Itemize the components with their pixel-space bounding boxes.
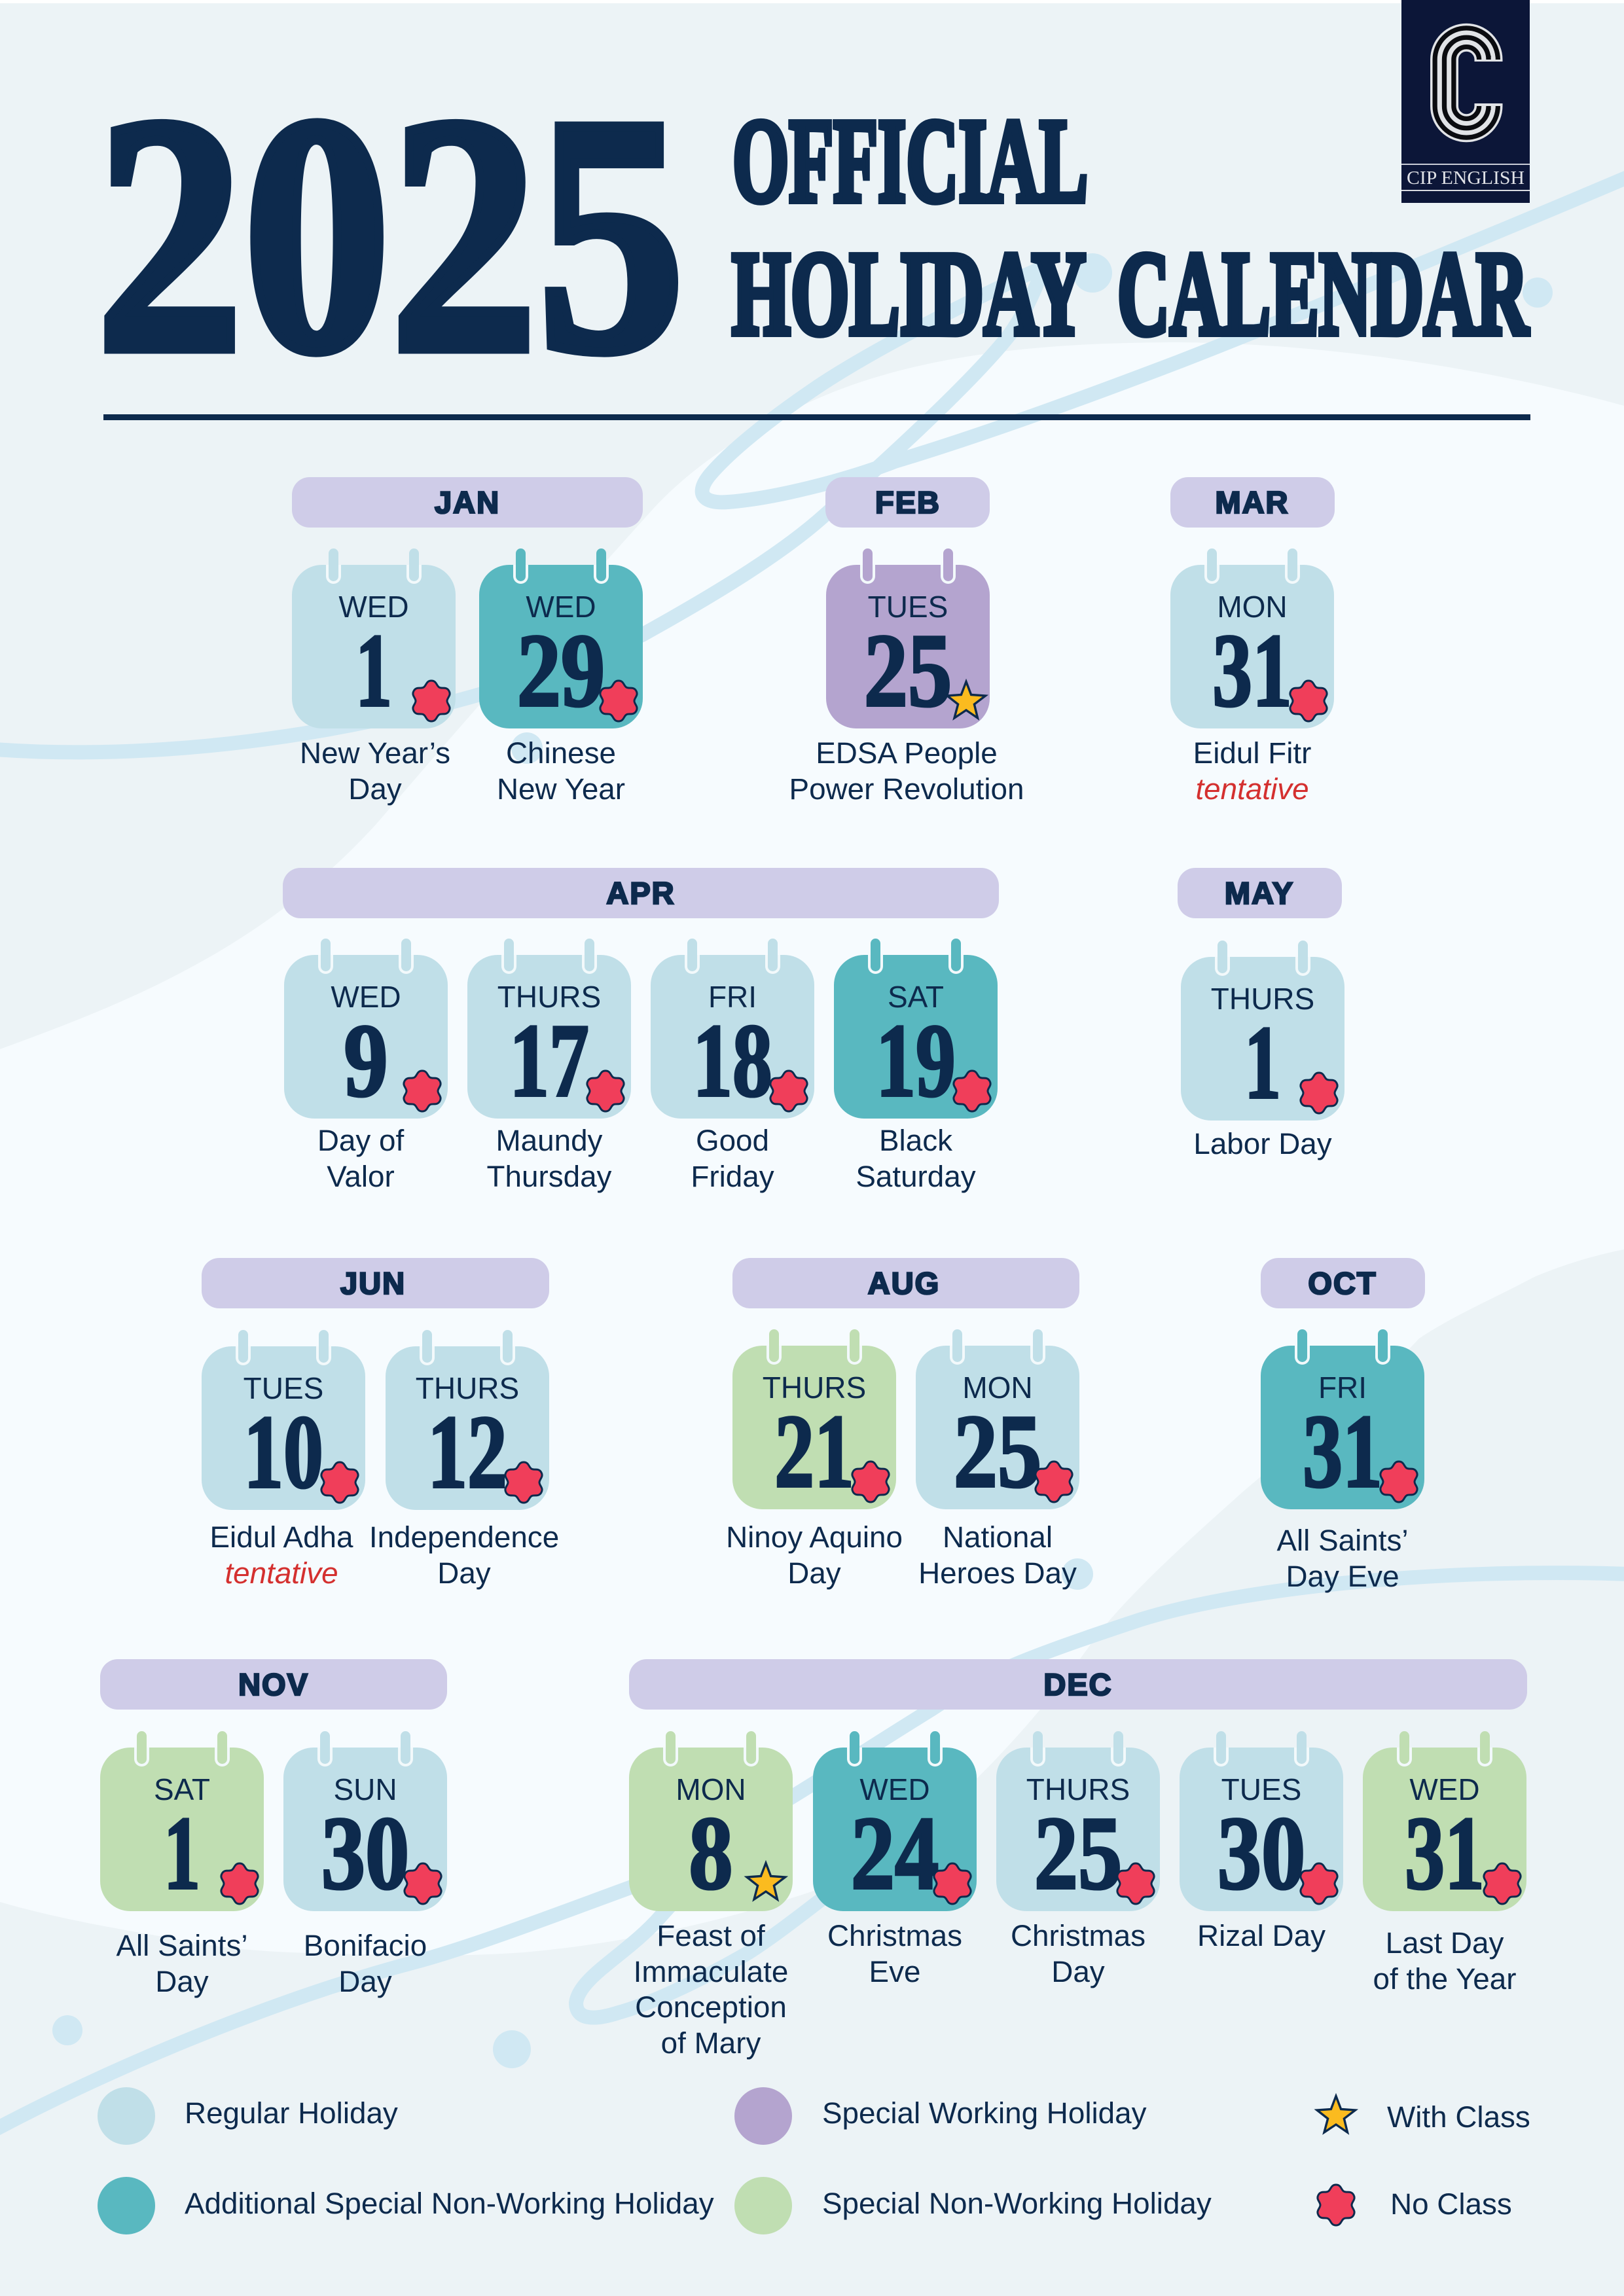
calendar: Nov 30 Bonifacio Day: 30 [321,1795,409,1911]
panel: FEB [789,477,1024,806]
icon: no class [505,1462,542,1503]
label: of the Year [1373,1962,1517,1996]
label: Bonifacio [304,1929,427,1962]
month header: JUN [202,1258,549,1308]
label: All Saints’ [1276,1524,1409,1557]
calendar: Aug 25 National Heroes Day: 25 [954,1393,1041,1509]
icon: no class [1290,681,1327,721]
label: Feast of [657,1919,765,1952]
legend item: Special Non-Working Holiday: Special Non-Working Holiday [822,2187,1212,2220]
calendar: Apr 9 Day of Valor [284,939,448,1193]
calendar: Apr 9 Day of Valor: 9 [344,1002,388,1119]
calendar: Jun 10 Eidul Adha [202,1330,365,1590]
icon: no class [321,1462,358,1503]
label: Rizal Day [1197,1919,1326,1952]
icon: no class [413,681,450,721]
label: Day Eve [1286,1560,1399,1593]
label: Good [696,1124,769,1157]
label: Day [787,1556,841,1590]
label: Maundy [496,1124,603,1157]
calendar: Apr 18 Good Friday: FRI [708,980,757,1014]
icon: no class [1301,1863,1337,1904]
icon: no class [1380,1462,1417,1502]
calendar: Dec 25 Christmas Day: THURS [1026,1772,1130,1806]
label: Christmas [1011,1919,1146,1952]
label: Day [437,1556,491,1590]
legend item: Regular Holiday [98,2087,398,2145]
month header: AUG: AUG [868,1266,940,1300]
legend [98,2087,1530,2234]
calendar: Dec 30 Rizal Day [1180,1731,1343,1952]
legend item: Additional Special Non-Working Holiday: Additional Special Non-Working Holiday [185,2187,714,2220]
icon: no class [1484,1863,1521,1904]
calendar: Dec 24 Christmas Eve: 24 [851,1795,939,1911]
label: Heroes Day [918,1556,1077,1590]
calendar: Nov 30 Bonifacio Day [283,1731,447,1998]
icon: no class [1117,1863,1154,1904]
legend item: Additional Special Non-Working Holiday [98,2177,714,2234]
month header: MAY [1178,868,1342,918]
label: Chinese [506,736,616,770]
calendar: Aug 25 National Heroes Day: MON [962,1371,1033,1405]
label: Eidul Adha [209,1520,353,1554]
icon: no class [587,1071,624,1111]
month header: FEB: FEB [875,485,941,520]
month header: NOV [100,1659,447,1710]
calendar: Nov 1 All Saints' Day [100,1731,264,1998]
label: Black [879,1124,952,1157]
calendar: Aug 21 Ninoy Aquino Day: THURS [763,1371,866,1405]
legend item: No Class [1318,2185,1512,2225]
calendar: Jan 1 New Year's Day: 1 [355,612,392,728]
calendar: Dec 31 Last Day of the Year: WED [1409,1772,1480,1806]
label: Immaculate [634,1955,788,1988]
calendar: Dec 8 Feast of Immaculate Conception: MON [676,1772,746,1806]
label: New Year’s [300,736,450,770]
icon: no class [1301,1073,1337,1113]
label: Independence [369,1520,559,1554]
month header: MAR: MAR [1215,485,1290,520]
label: Friday [691,1160,774,1193]
label: Eve [869,1955,920,1988]
month header: APR [283,868,999,918]
calendar: Nov 1 All Saints' Day: SAT [154,1772,210,1806]
calendar: Dec 24 Christmas Eve: WED [859,1772,930,1806]
panel: APR [283,868,999,1193]
calendar: Apr 18 Good Friday [651,939,814,1193]
month header: NOV: NOV [238,1667,309,1702]
legend item: Special Working Holiday: Special Working Holiday [822,2096,1147,2130]
label: Day [338,1965,392,1998]
calendar: Jun 10 Eidul Adha: 10 [244,1393,323,1510]
calendar: Feb 25 EDSA: TUES [868,590,948,624]
calendar: Dec 24 Christmas Eve [813,1731,977,1988]
month header: JAN [292,477,643,528]
label: Ninoy Aquino [726,1520,903,1554]
month header: APR: APR [606,876,676,910]
calendar: Dec 30 Rizal Day: 30 [1218,1795,1305,1911]
calendar: Jan 29 Chinese New Year [479,548,643,806]
label: EDSA People [816,736,998,770]
calendar: May 1 Labor Day: THURS [1211,982,1314,1016]
calendar: Nov 30 Bonifacio Day: SUN [333,1772,397,1806]
calendar: Apr 9 Day of Valor: WED [331,980,401,1014]
calendar: Dec 31 Last Day of the Year [1363,1731,1526,1996]
label: of Mary [661,2026,761,2060]
icon: with class [747,1863,785,1899]
panel: OCT [1261,1258,1425,1593]
calendar: Feb 25 EDSA: 25 [864,612,952,728]
month header: JAN: JAN [435,485,500,520]
calendar: Apr 17 Maundy Thursday [467,939,631,1193]
calendar: Dec 25 Christmas Day [996,1731,1160,1988]
legend item: Special Non-Working Holiday [734,2177,1212,2234]
panel: MAR [1170,477,1335,806]
label: Conception [635,1990,787,2024]
calendar: Dec 30 Rizal Day: TUES [1221,1772,1301,1806]
calendar: Apr 19 Black Saturday: SAT [888,980,944,1014]
legend item: With Class: With Class [1387,2100,1530,2134]
month header: OCT: OCT [1308,1266,1377,1300]
panel: DEC [629,1659,1527,2060]
calendar: Oct 31 All Saints' Day Eve [1261,1329,1424,1593]
panel: NOV [100,1659,447,1998]
icon: no class [405,1863,441,1904]
heading: HOLIDAY CALENDAR: HOLIDAY [732,227,1086,360]
icon: no class [934,1863,971,1904]
calendar: Aug 25 National Heroes Day [916,1329,1079,1590]
label: Day of [317,1124,404,1157]
icon: no class [600,681,637,721]
calendar: May 1 Labor Day: 1 [1244,1004,1281,1121]
label: Day [155,1965,209,1998]
calendar: May 1 Labor Day [1181,941,1344,1160]
logo: CIP English [1401,0,1530,203]
calendar: Dec 31 Last Day of the Year: 31 [1405,1795,1485,1911]
calendar: Jun 12 Independence Day [369,1330,559,1590]
calendar: Jan 1 New Year's Day [292,548,456,806]
month header: MAY: MAY [1225,876,1294,910]
calendar: Apr 17 Maundy Thursday: 17 [509,1002,589,1119]
calendar: Oct 31 All Saints' Day Eve: FRI [1318,1371,1367,1405]
calendar: Dec 25 Christmas Day: 25 [1034,1795,1122,1911]
calendar: Apr 19 Black Saturday [834,939,998,1193]
label: Valor [327,1160,395,1193]
legend item: Regular Holiday: Regular Holiday [185,2096,398,2130]
calendar: Aug 21 Ninoy Aquino Day [726,1329,903,1590]
legend item: No Class: No Class [1390,2187,1512,2221]
label: Day [1051,1955,1105,1988]
label: Day [348,772,402,806]
logo: CIP English: CIP ENGLISH [1407,168,1525,188]
title: 2025: 2025 [96,47,685,423]
icon: with class [947,682,986,718]
label: Power Revolution [789,772,1024,806]
icon: no class [852,1462,889,1502]
month header: DEC [629,1659,1527,1710]
heading: OFFICIAL: OFFICIAL [732,94,1088,227]
label: All Saints’ [116,1929,248,1962]
month header: OCT [1261,1258,1425,1308]
calendar: Apr 19 Black Saturday: 19 [876,1002,956,1119]
month header: DEC: DEC [1043,1667,1113,1702]
label: Thursday [487,1160,612,1193]
calendar: Jun 12 Independence Day: THURS [416,1371,519,1405]
panel: JAN [292,477,643,806]
divider rule [103,414,1530,420]
calendar: Aug 21 Ninoy Aquino Day: 21 [774,1393,854,1509]
calendar: Jun 12 Independence Day: 12 [427,1393,507,1510]
icon: no class [954,1071,990,1111]
label: New Year [497,772,625,806]
label: tentative [1195,772,1309,806]
month header: AUG [732,1258,1079,1308]
icon: no class [770,1071,807,1111]
month header: MAR [1170,477,1335,528]
calendar: Nov 1 All Saints' Day: 1 [164,1795,200,1911]
calendar: Jan 29 Chinese New Year: 29 [517,612,605,728]
label: Saturday [856,1160,976,1193]
calendar: Mar 31 Eidul Fitr: 31 [1212,612,1292,728]
label: Last Day [1386,1926,1504,1960]
calendar: Jun 10 Eidul Adha: TUES [244,1371,323,1405]
label: Christmas [827,1919,962,1952]
calendar: Jan 29 Chinese New Year: WED [526,590,596,624]
panel: AUG [726,1258,1079,1590]
label: Eidul Fitr [1193,736,1311,770]
calendar: Mar 31 Eidul Fitr [1170,548,1334,806]
icon: no class [221,1863,258,1904]
label: tentative [225,1556,338,1590]
icon: no class [1036,1462,1072,1502]
icon: no class [404,1071,441,1111]
calendar: Dec 8 Feast of Immaculate Conception: 8 [689,1795,733,1911]
calendar: Oct 31 All Saints' Day Eve: 31 [1303,1393,1382,1509]
panel: JUN [202,1258,559,1590]
legend item: Special Working Holiday [734,2087,1147,2145]
panel: MAY [1178,868,1344,1160]
month header: JUN: JUN [340,1266,406,1300]
legend item: With Class [1317,2096,1530,2134]
calendar: Feb 25 EDSA [789,548,1024,806]
calendar: Jan 1 New Year's Day: WED [338,590,409,624]
calendar: Apr 18 Good Friday: 18 [693,1002,772,1119]
label: Labor Day [1193,1127,1332,1160]
month header: FEB [825,477,990,528]
calendar: Dec 8 Feast of Immaculate Conception [629,1731,793,2060]
label: National [943,1520,1053,1554]
calendar: Mar 31 Eidul Fitr: MON [1217,590,1288,624]
calendar: Apr 17 Maundy Thursday: THURS [497,980,601,1014]
